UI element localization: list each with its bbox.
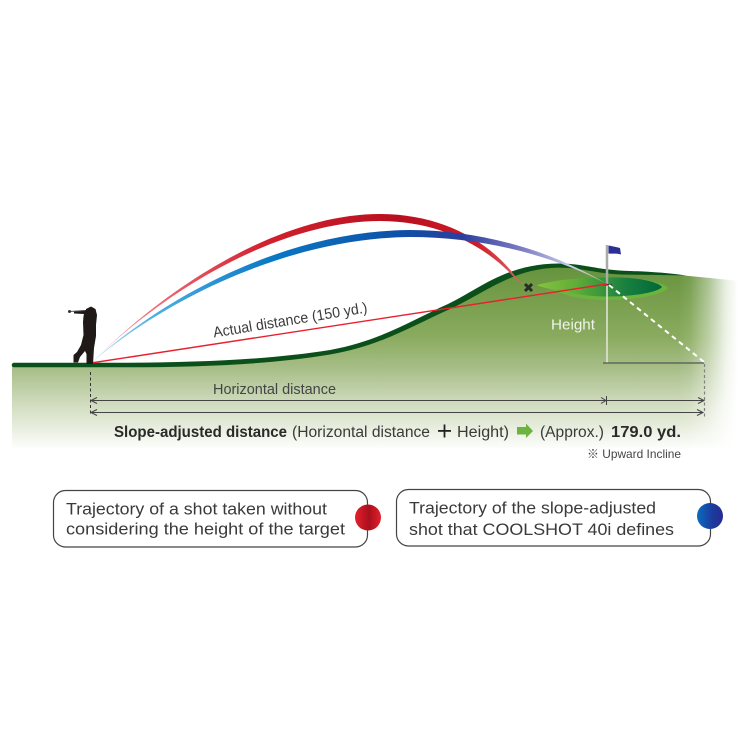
red trajectory xyxy=(91,214,528,363)
legend: blue trajectory: shot that COOLSHOT 40i defines xyxy=(409,520,674,539)
putting green xyxy=(537,277,668,300)
slope dashed line xyxy=(609,285,704,362)
actual distance label: Actual distance (150 yd.) xyxy=(212,299,369,341)
blue trajectory xyxy=(91,230,607,363)
golfer silhouette xyxy=(68,306,97,364)
slope-adjusted formula: Height) xyxy=(457,424,509,441)
slope-adjusted formula: (Approx.) xyxy=(540,424,604,441)
legend: red trajectory xyxy=(54,490,381,547)
legend: red trajectory: considering the height of the target xyxy=(66,519,345,538)
icon: green arrow xyxy=(517,424,533,438)
height label: Height xyxy=(551,317,595,333)
landing mark xyxy=(525,284,532,291)
start dashed marker xyxy=(90,372,92,416)
horizontal distance arrow xyxy=(91,396,704,405)
slope-adjusted formula: (Horizontal distance xyxy=(292,424,430,441)
slope-adjusted formula: Slope-adjusted distance xyxy=(114,424,287,441)
legend: blue trajectory: Trajectory of the slope-adjusted xyxy=(409,498,656,518)
slope-adjusted formula: 179.0 yd. xyxy=(611,424,681,441)
height base line xyxy=(603,362,704,364)
end dashed marker xyxy=(704,364,706,418)
ground and hill xyxy=(12,260,750,455)
flag xyxy=(603,245,621,286)
slope-adjusted formula xyxy=(114,424,681,441)
legend: red trajectory: Trajectory of a shot taken without xyxy=(66,499,327,518)
slope-adjusted distance arrow xyxy=(91,410,703,416)
footnote: ※ Upward Incline xyxy=(587,447,681,461)
actual distance line xyxy=(91,284,607,363)
horizontal distance label: Horizontal distance xyxy=(213,381,336,398)
legend: blue trajectory xyxy=(396,490,723,546)
height vertical line xyxy=(606,284,608,363)
